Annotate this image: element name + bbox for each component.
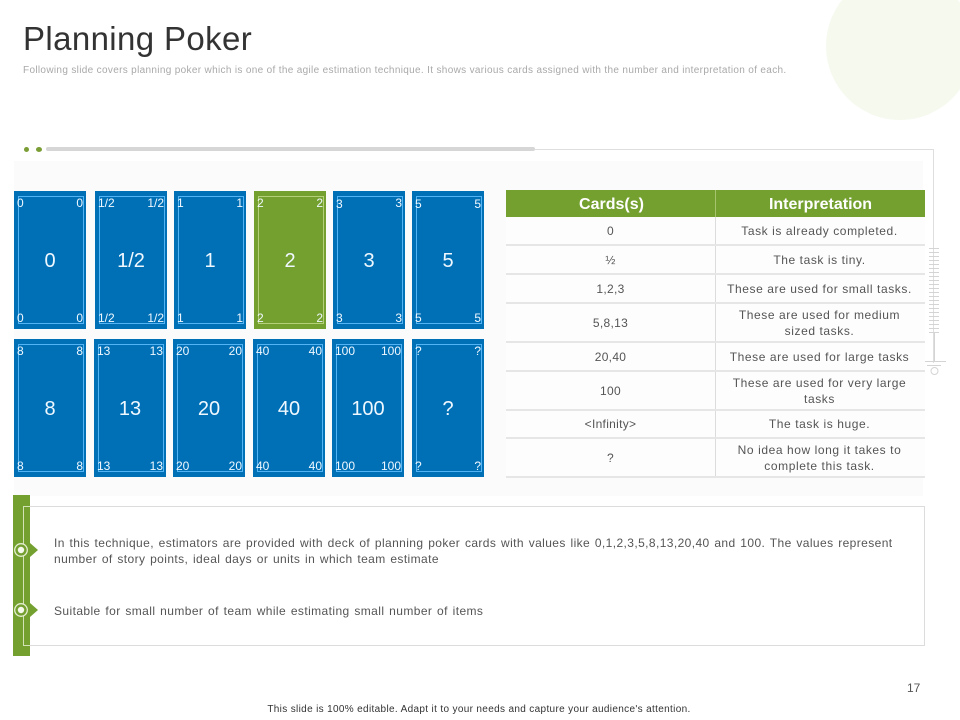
card question mark bbox=[412, 339, 484, 477]
interpretation table bbox=[506, 190, 925, 478]
row 5,8,13: 5,8,13 bbox=[593, 316, 628, 330]
card 20: 20 bbox=[176, 344, 189, 358]
card 100: 100 bbox=[335, 344, 355, 358]
card 2 highlighted bbox=[254, 191, 326, 329]
row one half: ½ bbox=[605, 252, 616, 266]
card 13 bbox=[94, 339, 166, 477]
row 1,2,3 bbox=[506, 275, 925, 304]
card 3: 3 bbox=[336, 311, 343, 325]
row 5,8,13 bbox=[506, 304, 925, 343]
card 5: 5 bbox=[442, 250, 454, 272]
card 8: 8 bbox=[76, 459, 83, 473]
card 3 bbox=[333, 191, 405, 329]
table header bbox=[506, 190, 925, 217]
row question mark: No idea how long it takes to complete this task. bbox=[738, 442, 901, 472]
card 0: 0 bbox=[76, 311, 83, 325]
card 1 bbox=[174, 191, 246, 329]
row 20,40 bbox=[506, 343, 925, 372]
card 5: 5 bbox=[415, 197, 422, 211]
card 3: 3 bbox=[395, 196, 402, 210]
row 0: 0 bbox=[607, 224, 614, 238]
green side bar bbox=[13, 495, 30, 656]
note text 1: In this technique, estimators are provided with deck of planning poker cards with values like 0,1,2,3,5,8,13,20,40 and 100. The values represent bbox=[54, 536, 893, 550]
row 1,2,3: 1,2,3 bbox=[596, 282, 625, 296]
row 0: Task is already completed. bbox=[741, 224, 898, 238]
card 8 bbox=[14, 339, 86, 477]
card 1/2 bbox=[95, 191, 167, 329]
card 1/2: 1/2 bbox=[98, 196, 115, 210]
card 100: 100 bbox=[351, 398, 385, 420]
row infinity bbox=[506, 411, 925, 439]
card 1/2: 1/2 bbox=[98, 311, 115, 325]
card 3: 3 bbox=[336, 197, 343, 211]
footer note: This slide is 100% editable. Adapt it to your needs and capture your audience's attention. bbox=[267, 704, 691, 715]
card 1/2: 1/2 bbox=[117, 250, 145, 272]
row infinity: <Infinity> bbox=[585, 417, 636, 431]
row 1,2,3: These are used for small tasks. bbox=[727, 282, 912, 296]
card 5: 5 bbox=[474, 311, 481, 325]
title: Planning Poker bbox=[23, 20, 252, 57]
card 2 highlighted: 2 bbox=[316, 311, 323, 325]
row 0 bbox=[506, 217, 925, 246]
card 1: 1 bbox=[236, 196, 243, 210]
scale icon bbox=[925, 248, 946, 375]
card 13: 13 bbox=[97, 459, 110, 473]
card 13: 13 bbox=[150, 459, 163, 473]
card 0: 0 bbox=[76, 196, 83, 210]
card 20 bbox=[173, 339, 245, 477]
decorative corner circle bbox=[826, 0, 960, 120]
connector frame line bbox=[535, 149, 934, 363]
note text 1 bbox=[54, 536, 893, 566]
card 20: 20 bbox=[229, 344, 242, 358]
row one half: The task is tiny. bbox=[773, 252, 866, 266]
card 5: 5 bbox=[474, 197, 481, 211]
notes panel border bbox=[23, 506, 925, 646]
bullet marker 2 bbox=[14, 603, 38, 617]
card 40: 40 bbox=[256, 459, 269, 473]
row 20,40: 20,40 bbox=[595, 350, 626, 364]
card 1: 1 bbox=[236, 311, 243, 325]
table header: Interpretation bbox=[769, 196, 872, 213]
card 8: 8 bbox=[17, 344, 24, 358]
note text 1: number of story points, ideal days or units in which team estimate bbox=[54, 552, 439, 566]
card question mark: ? bbox=[474, 459, 481, 473]
content background panel bbox=[14, 161, 923, 496]
card 2 highlighted: 2 bbox=[257, 196, 264, 210]
card 0: 0 bbox=[44, 250, 56, 272]
card 0 bbox=[14, 191, 86, 329]
card 100: 100 bbox=[335, 459, 355, 473]
card question mark: ? bbox=[415, 459, 422, 473]
card 8: 8 bbox=[44, 398, 56, 420]
card 0: 0 bbox=[17, 196, 24, 210]
row question mark: ? bbox=[607, 450, 614, 464]
card 2 highlighted: 2 bbox=[284, 250, 296, 272]
card 5 bbox=[412, 191, 484, 329]
card 13: 13 bbox=[97, 344, 110, 358]
card 1: 1 bbox=[177, 196, 184, 210]
dots and header rule bbox=[24, 147, 535, 152]
card 40: 40 bbox=[309, 344, 322, 358]
card 5: 5 bbox=[415, 311, 422, 325]
row question mark bbox=[506, 439, 925, 478]
card 8: 8 bbox=[76, 344, 83, 358]
note text 2: Suitable for small number of team while estimating small number of items bbox=[54, 604, 483, 618]
card 20: 20 bbox=[198, 398, 220, 420]
card 40 bbox=[253, 339, 325, 477]
card 40: 40 bbox=[256, 344, 269, 358]
card 40: 40 bbox=[309, 459, 322, 473]
card 20: 20 bbox=[229, 459, 242, 473]
subtitle: Following slide covers planning poker which is one of the agile estimation technique. It shows various cards assigned with the number and interpretation of each. bbox=[23, 65, 787, 76]
card 1/2: 1/2 bbox=[147, 311, 164, 325]
bullet marker 1 bbox=[14, 543, 38, 557]
row 100: 100 bbox=[600, 384, 621, 398]
page number: 17 bbox=[907, 681, 920, 695]
card 1: 1 bbox=[177, 311, 184, 325]
card 100: 100 bbox=[381, 344, 401, 358]
card 40: 40 bbox=[278, 398, 300, 420]
card question mark: ? bbox=[442, 398, 454, 420]
card 13: 13 bbox=[150, 344, 163, 358]
card question mark: ? bbox=[474, 344, 481, 358]
row 100: These are used for very large tasks bbox=[733, 376, 906, 406]
card question mark: ? bbox=[415, 344, 422, 358]
row one half bbox=[506, 246, 925, 275]
row infinity: The task is huge. bbox=[769, 417, 870, 431]
card 0: 0 bbox=[17, 311, 24, 325]
card 13: 13 bbox=[119, 398, 141, 420]
card 20: 20 bbox=[176, 459, 189, 473]
card 8: 8 bbox=[17, 459, 24, 473]
card 3: 3 bbox=[395, 311, 402, 325]
card 100: 100 bbox=[381, 459, 401, 473]
side bar inner line bbox=[23, 506, 30, 646]
card 100 bbox=[332, 339, 404, 477]
card 2 highlighted: 2 bbox=[316, 196, 323, 210]
card 2 highlighted: 2 bbox=[257, 311, 264, 325]
card 3: 3 bbox=[363, 250, 375, 272]
card 1/2: 1/2 bbox=[147, 196, 164, 210]
card 1: 1 bbox=[204, 250, 216, 272]
row 100 bbox=[506, 372, 925, 411]
row 20,40: These are used for large tasks bbox=[730, 350, 909, 364]
row 5,8,13: These are used for medium sized tasks. bbox=[739, 308, 900, 338]
table header: Cards(s) bbox=[579, 196, 644, 213]
